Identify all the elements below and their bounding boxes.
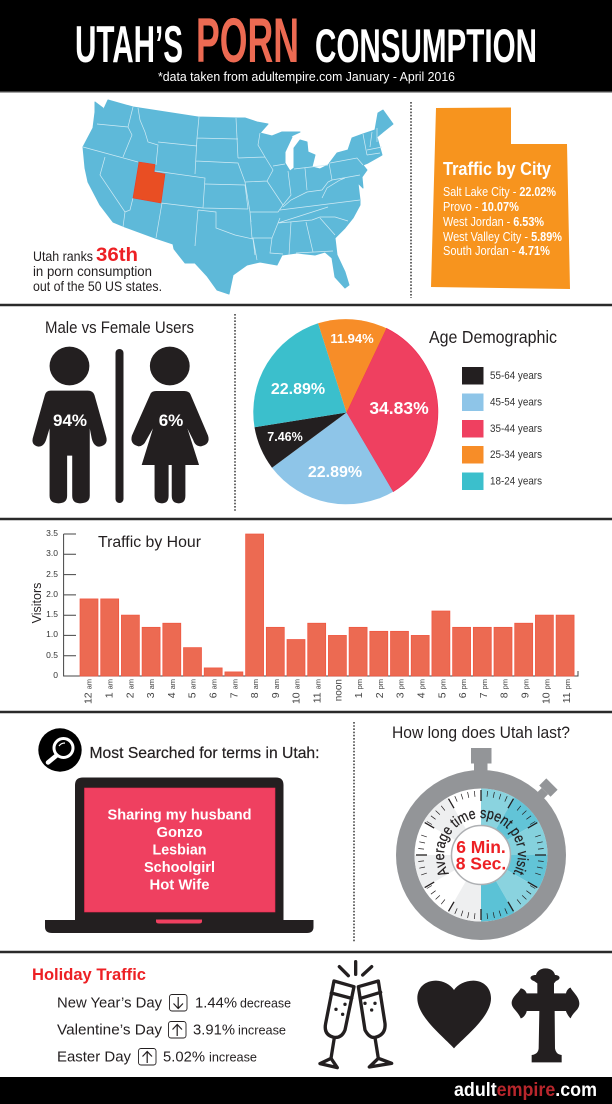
ranking text: Utah ranks (33, 248, 93, 264)
heading: age demographic: Age Demographic (429, 327, 557, 347)
Utah shape (431, 108, 570, 289)
icon: divider bar (116, 349, 124, 503)
y axis: 3.0 (46, 548, 58, 558)
search terms: Gonzo (156, 824, 202, 841)
legend: 35-44 years (490, 423, 542, 435)
city list: Salt Lake City - 22.02% (443, 185, 556, 199)
pie chart: age demographic (253, 319, 438, 504)
city list: Provo - 10.07% (443, 200, 519, 214)
ranking text: in porn consumption (33, 263, 152, 279)
heading: Traffic by City (443, 159, 551, 179)
x axis hour labels: 3 am (145, 679, 157, 698)
title: UTAH’S (75, 16, 183, 74)
panel: most searched terms (38, 728, 320, 933)
legend: 25-34 years (490, 449, 542, 461)
x axis hour labels: 4 am (166, 679, 178, 698)
row: easter day: increase (209, 1050, 257, 1064)
ranking text: out of the 50 US states. (33, 278, 162, 294)
header banner (0, 0, 612, 92)
y axis: 0.5 (46, 650, 58, 660)
duration (456, 837, 506, 874)
title: PORN (196, 6, 299, 76)
legend (462, 367, 542, 490)
icon: laptop (45, 778, 314, 933)
pie labels (267, 331, 429, 481)
x axis hour labels: 11 pm (561, 679, 573, 703)
legend: 45-54 years (490, 396, 542, 408)
divider (353, 722, 355, 942)
footer (0, 1077, 612, 1104)
slice 45-54 (272, 412, 393, 504)
pie labels: 7.46% (267, 430, 303, 444)
duration: 6 Min. (456, 837, 506, 857)
y axis: 2.0 (46, 589, 58, 599)
x axis hour labels: 8 pm (499, 679, 511, 698)
panel: how long does Utah last (392, 723, 570, 940)
icon: champagne glasses (320, 962, 392, 1068)
legend: 55-64 years (490, 370, 542, 382)
divider (410, 102, 412, 298)
y axis: 1.0 (46, 629, 58, 639)
ranking text (33, 244, 162, 294)
y axis (46, 528, 578, 680)
row: new year's day: New Year’s Day (57, 996, 163, 1012)
y axis: 0 (53, 670, 58, 680)
x axis hour labels: 9 am (270, 679, 282, 698)
curved label: Average time spent per visit. (436, 810, 529, 876)
panel: holiday traffic (32, 962, 579, 1068)
search terms (108, 806, 252, 894)
x axis hour labels: 7 pm (478, 679, 490, 698)
pie labels: 11.94% (330, 331, 374, 346)
x axis hour labels: 10 am (291, 679, 303, 704)
row: valentine's day: increase (238, 1024, 286, 1038)
city list: South Jordan - 4.71% (443, 244, 550, 258)
search terms: Schoolgirl (144, 859, 215, 876)
row: valentine's day: 3.91% (193, 1022, 235, 1038)
x axis hour labels: 10 pm (540, 679, 552, 704)
bars (80, 534, 574, 676)
icon: cross (512, 968, 579, 1062)
legend: 18-24 years (490, 476, 542, 488)
slice 55-64 (254, 412, 346, 468)
row: easter day: Easter Day (57, 1050, 132, 1066)
x axis hour labels: 2 pm (374, 679, 386, 698)
data source note: *data taken from adultempire.com January - April 2016 (158, 70, 455, 84)
x axis hour labels: 7 am (228, 679, 240, 698)
y axis: 3.5 (46, 528, 58, 538)
slice 18-24 (253, 323, 346, 427)
icon: magnifying glass (38, 728, 82, 772)
x axis hour labels: 6 pm (457, 679, 469, 698)
row: easter day (57, 1048, 257, 1066)
title (75, 6, 537, 76)
x axis hour labels: 3 pm (395, 679, 407, 698)
clock ticks (416, 790, 546, 920)
icon: stopwatch (396, 748, 566, 940)
row: valentine's day (57, 1022, 286, 1038)
x axis hour labels: 6 am (208, 679, 220, 698)
city list (443, 185, 562, 258)
search terms: Sharing my husband (108, 806, 252, 824)
heading: Holiday Traffic (32, 966, 146, 984)
x axis hour labels: 1 pm (353, 679, 365, 698)
male percent: 94% (53, 411, 87, 430)
x axis hour labels: 5 pm (436, 679, 448, 698)
panel: male vs female (32, 318, 209, 503)
panel: traffic by city (431, 108, 570, 289)
pie labels: 22.89% (271, 381, 325, 398)
heading: Male vs Female Users (45, 318, 194, 337)
pie labels: 22.89% (308, 464, 362, 481)
x axis hour labels (83, 679, 573, 704)
heading: Most Searched for terms in Utah: (90, 745, 320, 762)
y axis: 1.5 (46, 609, 58, 619)
x axis hour labels: 1 am (104, 679, 116, 698)
duration: 8 Sec. (456, 854, 506, 874)
x axis hour labels: noon (333, 679, 344, 701)
city list: West Jordan - 6.53% (443, 215, 544, 229)
x axis hour labels: 5 am (187, 679, 199, 698)
row: new year's day: 1.44% (195, 996, 237, 1012)
search terms: Lesbian (152, 842, 206, 858)
row: valentine's day: Valentine’s Day (57, 1022, 163, 1038)
female percent: 6% (159, 411, 183, 430)
ranking text: 36th (96, 244, 138, 266)
slice 25-34 (318, 319, 386, 412)
pie labels: 34.83% (369, 398, 429, 418)
y axis: 2.5 (46, 569, 58, 579)
x axis hour labels: 2 am (124, 679, 136, 698)
x axis hour labels: 9 pm (520, 679, 532, 698)
clock wedges (414, 788, 548, 922)
x axis hour labels: 11 am (312, 679, 324, 703)
row: easter day: 5.02% (163, 1050, 205, 1066)
icon: heart (417, 981, 491, 1048)
bar chart: traffic by hour (30, 528, 578, 704)
heading: How long does Utah last? (392, 723, 570, 742)
divider (234, 314, 236, 511)
icon: female figure (131, 347, 209, 503)
panel: US map ranking (33, 100, 393, 294)
x axis hour labels: 4 pm (416, 679, 428, 698)
row: new year's day: decrease (240, 996, 291, 1010)
x axis hour labels: 8 am (249, 679, 261, 698)
US map (83, 100, 393, 294)
row: new year's day (57, 994, 291, 1012)
Utah highlight (133, 162, 165, 203)
footer logo: adultempire.com (454, 1080, 597, 1101)
y axis label: Visitors (30, 583, 44, 623)
city list: West Valley City - 5.89% (443, 230, 562, 244)
chart title: Traffic by Hour (98, 534, 201, 551)
search terms: Hot Wife (150, 876, 210, 894)
x axis hour labels: 12 am (83, 679, 95, 704)
slice 35-44 (346, 328, 438, 492)
icon: male figure (32, 347, 107, 503)
